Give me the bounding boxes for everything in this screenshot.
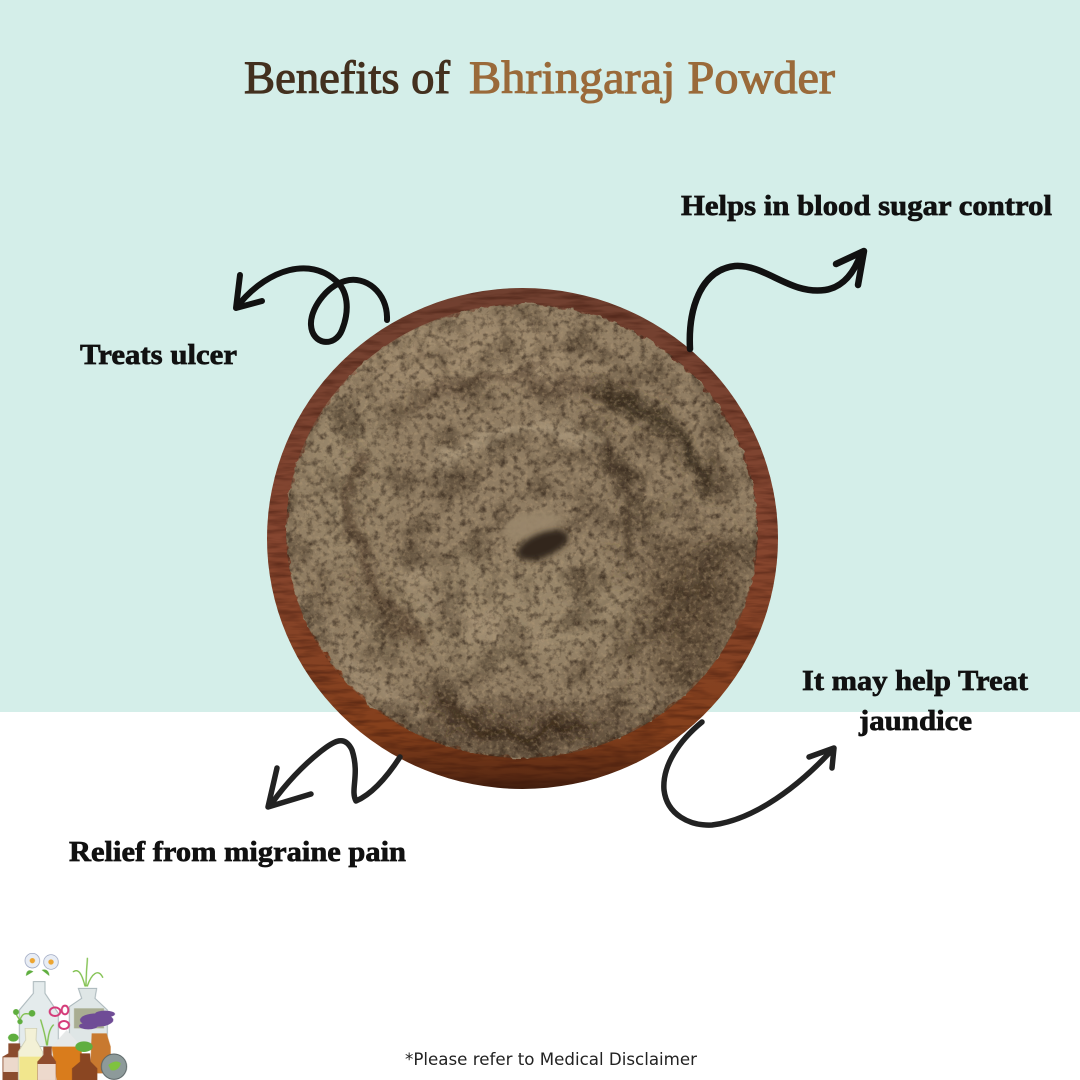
marble bbox=[101, 1054, 127, 1079]
arrow: to jaundice bbox=[664, 722, 834, 825]
mint background panel bbox=[0, 0, 1080, 712]
powder clumps bbox=[280, 295, 770, 765]
label: migraine: Relief from migraine pain bbox=[69, 836, 406, 868]
right clear bottle bbox=[69, 988, 107, 1043]
centre hollow bbox=[502, 510, 563, 544]
yellow bottle bbox=[18, 1028, 43, 1080]
label: ulcer: Treats ulcer bbox=[80, 339, 237, 371]
title bbox=[244, 52, 835, 104]
arrow: to blood sugar bbox=[690, 251, 864, 349]
powder grain, dark bbox=[280, 295, 770, 765]
lavender bbox=[79, 1011, 115, 1029]
powder bbox=[280, 295, 770, 765]
arrow: to migraine bbox=[268, 741, 400, 807]
middle brown bottle bbox=[37, 1047, 56, 1080]
daisies bbox=[25, 953, 58, 969]
big clear bottle bbox=[19, 982, 58, 1047]
leaves bbox=[8, 970, 93, 1052]
wooden bowl bbox=[267, 288, 778, 789]
title: Bhringaraj Powder bbox=[469, 52, 835, 104]
title: Benefits of bbox=[244, 52, 450, 104]
label: jaundice: jaundice bbox=[858, 705, 972, 737]
disclaimer: *Please refer to Medical Disclaimer bbox=[405, 1050, 697, 1070]
powder grain, light bbox=[280, 295, 770, 765]
label: blood sugar: Helps in blood sugar control bbox=[681, 190, 1052, 222]
label: jaundice: It may help Treat bbox=[802, 665, 1028, 697]
bowl of bhringaraj powder bbox=[267, 288, 778, 789]
left brown bottle bbox=[3, 1043, 21, 1080]
label: jaundice bbox=[802, 665, 1028, 737]
logo: herb bottles bbox=[3, 953, 127, 1080]
orange bottle bbox=[52, 1030, 82, 1080]
arrow: to Treats ulcer bbox=[236, 268, 387, 342]
front brown bottle bbox=[72, 1053, 97, 1080]
grass sprigs bbox=[15, 958, 103, 1045]
right amber bottle bbox=[90, 1033, 111, 1073]
pink orchid bbox=[50, 1006, 69, 1029]
broad shading of powder mounds bbox=[300, 321, 745, 759]
